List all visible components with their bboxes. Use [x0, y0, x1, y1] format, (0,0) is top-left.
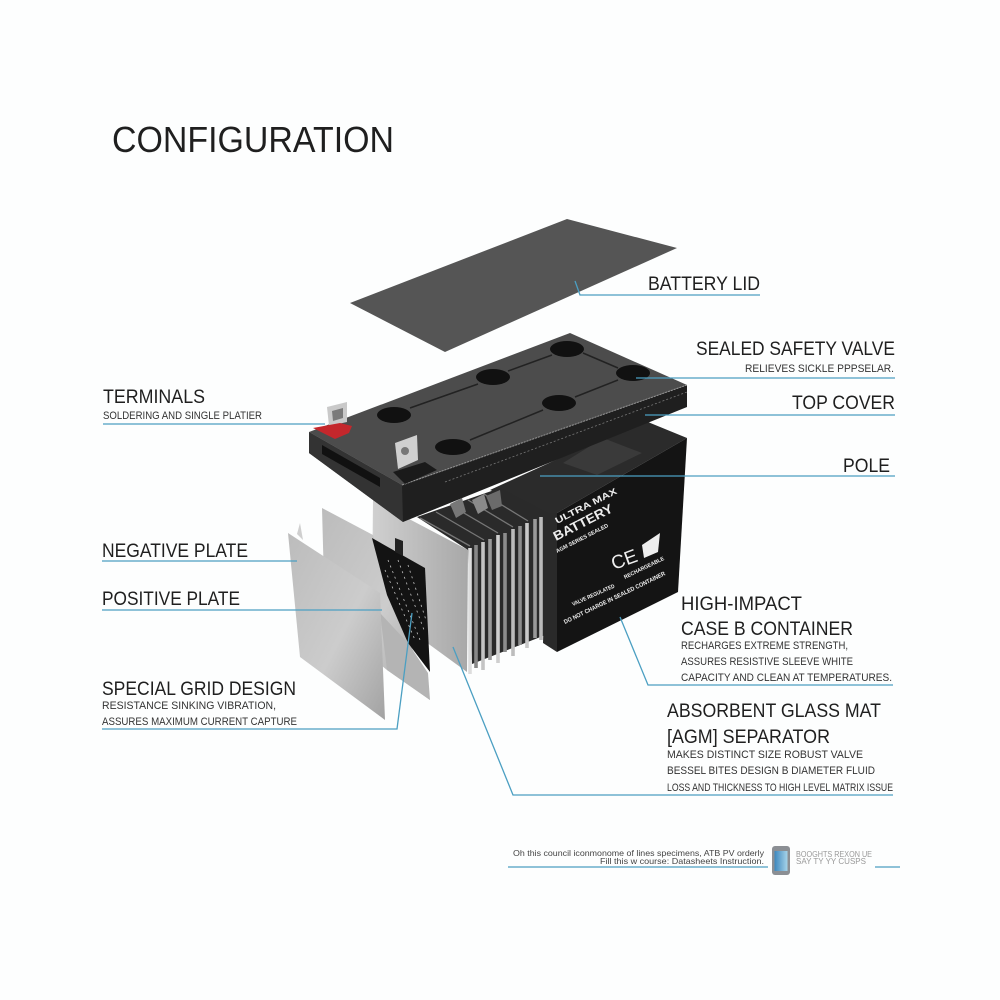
callout: special grid design: SPECIAL GRID DESIGN	[102, 679, 296, 700]
callout: special grid design: RESISTANCE SINKING VIBRATION,	[102, 700, 276, 712]
callout: absorbent glass mat separator: BESSEL BITES DESIGN B DIAMETER FLUID	[667, 765, 875, 777]
callout: special grid design: ASSURES MAXIMUM CURRENT CAPTURE	[102, 716, 297, 728]
footer side note	[796, 850, 900, 867]
case label print: CE	[609, 546, 641, 575]
negative terminal	[393, 435, 437, 484]
icon: battery cell	[772, 846, 790, 875]
callout: sealed safety valve: SEALED SAFETY VALVE	[696, 339, 895, 360]
callout: high-impact case and container: RECHARGES EXTREME STRENGTH,	[681, 640, 848, 652]
top cover	[309, 333, 687, 522]
callout: high-impact case and container: ASSURES RESISTIVE SLEEVE WHITE	[681, 656, 853, 668]
negative plate	[288, 533, 385, 720]
positive terminal	[313, 402, 352, 439]
callout: high-impact case and container	[620, 594, 893, 685]
callout: positive plate: POSITIVE PLATE	[102, 589, 240, 610]
callout: absorbent glass mat separator: LOSS AND THICKNESS TO HIGH LEVEL MATRIX ISSUE	[667, 782, 893, 794]
callout: absorbent glass mat separator: MAKES DISTINCT SIZE ROBUST VALVE	[667, 749, 863, 761]
footer note: Oh this council iconmonome of lines specimens, ATB PV orderly	[513, 848, 765, 858]
callout: absorbent glass mat separator: ABSORBENT GLASS MAT	[667, 701, 881, 722]
callout: absorbent glass mat separator	[453, 647, 893, 795]
case label print: AGM SERIES SEALED	[555, 523, 610, 555]
footer note	[508, 848, 768, 867]
callout: battery lid	[575, 274, 760, 295]
positive plate	[322, 508, 430, 700]
footer note: Fill this w course: Datasheets Instruction.	[600, 856, 764, 866]
callout: absorbent glass mat separator: [AGM] SEPARATOR	[667, 727, 830, 748]
callout: special grid design	[102, 613, 412, 729]
case label print	[551, 486, 667, 626]
battery lid panel	[350, 219, 677, 352]
case label print: DO NOT CHARGE IN SEALED CONTAINER	[563, 571, 667, 626]
callout: high-impact case and container: HIGH-IMPACT	[681, 594, 802, 615]
footer side note: SAY TY YY CUSPS	[796, 857, 866, 866]
case label print: VALVE REGULATED	[571, 584, 616, 608]
callout: pole: POLE	[843, 456, 890, 477]
callout: terminals: TERMINALS	[103, 387, 205, 408]
callout: top cover: TOP COVER	[792, 393, 895, 414]
case label print: RECHARGEABLE	[623, 556, 666, 581]
case label print: BATTERY	[551, 501, 616, 544]
callout: battery lid: BATTERY LID	[648, 274, 760, 295]
callout: terminals	[103, 387, 325, 424]
plate tab	[297, 523, 303, 540]
case label print: ULTRA MAX	[553, 486, 618, 526]
callout: terminals: SOLDERING AND SINGLE PLATIER	[103, 410, 262, 422]
callout: sealed safety valve: RELIEVES SICKLE PPPSELAR.	[745, 363, 894, 375]
battery case	[490, 420, 687, 652]
callout: high-impact case and container: CAPACITY AND CLEAN AT TEMPERATURES.	[681, 672, 892, 684]
callout: negative plate: NEGATIVE PLATE	[102, 541, 248, 562]
plate stack	[372, 488, 548, 674]
footer side note: BOOGHTS REXON UE	[796, 850, 872, 859]
grid texture	[385, 560, 426, 640]
valve holes	[377, 341, 650, 455]
title: CONFIGURATION	[112, 119, 394, 160]
callout: high-impact case and container: CASE B CONTAINER	[681, 619, 853, 640]
callout: sealed safety valve	[636, 339, 895, 378]
